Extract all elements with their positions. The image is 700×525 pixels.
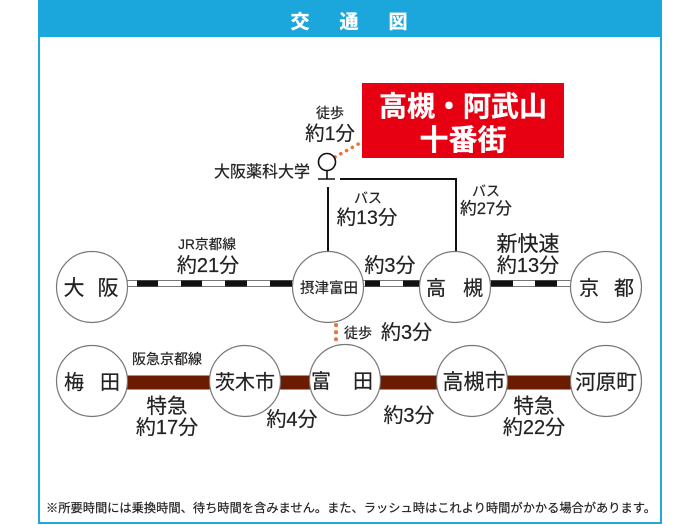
- label: walk 1 min: 約1分: [305, 123, 355, 145]
- walking path: Settsu-Tonda to Tonda: [334, 325, 338, 341]
- station names: JR: 京: [579, 277, 599, 300]
- station names: JR: 高: [426, 277, 446, 300]
- label: limited express 17 min: 約17分: [136, 416, 198, 439]
- footnote: ※所要時間には乗換時間、待ち時間を含みません。また、ラッシュ時はこれより時間がかかる場合があります。: [46, 500, 656, 515]
- label: special rapid 13 min: 約13分: [497, 254, 559, 277]
- station names: Hankyu: 高槻市: [442, 371, 506, 394]
- label: bus 27 min: バス: [472, 183, 500, 199]
- label: walk 3 min: [344, 321, 432, 344]
- label: 4 min: 約4分: [266, 408, 318, 431]
- label: bus 27 min: [460, 183, 512, 218]
- header bar: 図: [388, 12, 408, 33]
- station icon: Osaka University of Pharmaceutical Sciences: [318, 154, 336, 179]
- label: limited express 22 min: 特急: [514, 395, 554, 418]
- label: university: 大阪薬科大学: [214, 163, 310, 181]
- station names: JR: 大: [64, 277, 84, 300]
- bus lines: [328, 179, 456, 252]
- station names: Hankyu: [64, 370, 637, 394]
- label: 3 min to Takatsuki: 約3分: [364, 254, 416, 277]
- station names: JR: 都: [614, 277, 634, 300]
- JR line: [125, 280, 605, 286]
- destination box: 十番街: [419, 124, 507, 157]
- label: limited express 22 min: [503, 395, 565, 439]
- station names: JR: [64, 277, 634, 300]
- label: limited express 22 min: 約22分: [503, 416, 565, 439]
- label: JR Kyoto line 21 min: JR京都線: [178, 237, 236, 252]
- station names: Hankyu: 田: [353, 371, 373, 393]
- Hankyu line: [125, 376, 605, 390]
- station names: JR: 槻: [463, 277, 483, 300]
- station names: JR: 摂津富田: [300, 280, 358, 297]
- station names: Hankyu: 梅: [64, 371, 84, 394]
- station names: Hankyu: 河原町: [575, 371, 637, 394]
- label: bus 13 min: バス: [354, 190, 382, 206]
- label: JR Kyoto line 21 min: [177, 237, 239, 277]
- station names: Hankyu: 田: [100, 372, 120, 394]
- label: walk 3 min: 約3分: [381, 321, 432, 344]
- station circles: [56, 252, 642, 416]
- walking path: university to destination: [335, 142, 362, 157]
- label: walk 3 min: 徒歩: [344, 325, 372, 341]
- station names: Hankyu: 富: [311, 370, 331, 393]
- label: walk 1 min: [305, 105, 355, 145]
- label: special rapid 13 min: [496, 233, 560, 277]
- header bar: 交: [290, 11, 310, 33]
- station names: JR: 阪: [98, 277, 118, 300]
- destination box: 高槻・阿武山: [379, 91, 547, 122]
- label: limited express 17 min: 特急: [146, 395, 188, 418]
- label: limited express 17 min: [136, 395, 198, 439]
- label: bus 27 min: 約27分: [460, 199, 512, 218]
- header bar: [38, 0, 662, 37]
- label: bus 13 min: 約13分: [337, 207, 398, 229]
- label: special rapid 13 min: 新快速: [496, 233, 560, 256]
- label: Hankyu Kyoto line: 阪急京都線: [132, 351, 202, 367]
- label: JR Kyoto line 21 min: 約21分: [177, 254, 239, 277]
- label: 3 min: 約3分: [383, 404, 435, 427]
- label: walk 1 min: 徒歩: [316, 105, 344, 121]
- label: bus 13 min: [337, 190, 398, 229]
- station names: Hankyu: 茨木市: [215, 371, 275, 394]
- header bar: 通: [339, 11, 359, 33]
- destination box: [362, 83, 564, 158]
